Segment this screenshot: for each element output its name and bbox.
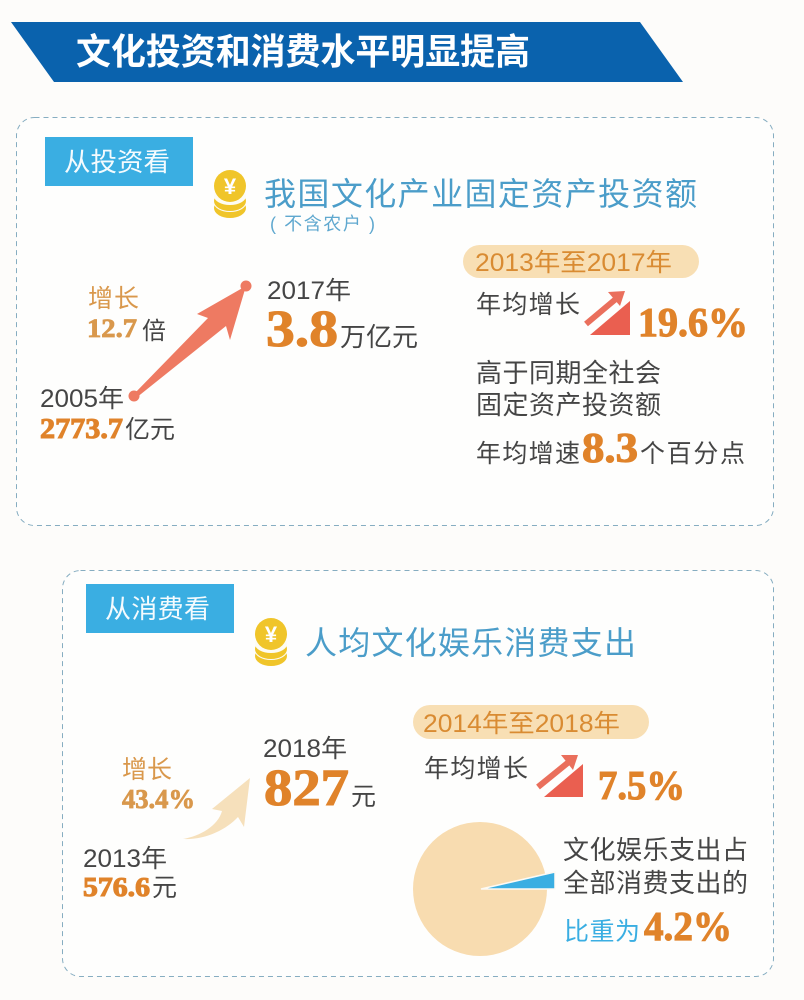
text: higher than society-wide investment: [476, 358, 661, 420]
text: average annual growth: 年均增长: [424, 755, 528, 783]
label: 2017 value: [266, 277, 418, 358]
icon: coins: [255, 618, 287, 666]
text: average annual growth: 年均增长: [476, 291, 580, 319]
label: 2018 value: [263, 735, 376, 817]
label: growth multiple: 增长: [88, 285, 139, 313]
label: 2018 value: 827: [264, 760, 349, 817]
label: 2005 value: 2773.7: [40, 413, 123, 445]
pill: 2014 to 2018: [413, 705, 649, 739]
tag: from consumption: [86, 584, 234, 633]
tag: from investment: [45, 137, 193, 186]
text: 8.3 percentage points: 8.3: [582, 426, 638, 472]
label: 2005 value: [40, 385, 175, 445]
pie chart: share of spending: [413, 822, 555, 956]
text: share of total consumption: 全部消费支出的: [563, 868, 748, 898]
label: growth multiple: 12.7: [87, 314, 137, 343]
label: 2018 value: 元: [351, 783, 376, 811]
title banner: 文化投资和消费水平明显提高: [76, 23, 530, 75]
heading: per capita spending: 人均文化娱乐消费支出: [305, 625, 636, 661]
text: 8.3 percentage points: 个百分点: [640, 440, 745, 468]
text: share of total consumption: [563, 835, 748, 949]
arrow: consumption growth: [183, 778, 250, 839]
label: 2005 value: 亿元: [125, 416, 175, 444]
label: 2013 value: 元: [152, 874, 177, 902]
text: higher than society-wide investment: 高于同期全社会: [476, 358, 661, 388]
text: higher than society-wide investment: 固定资产投资额: [476, 390, 661, 420]
pill: 2014 to 2018: 2014年至2018年: [423, 710, 620, 738]
value: 19.6 percent: 19.6%: [638, 299, 748, 345]
tag: from consumption: 从消费看: [105, 594, 210, 624]
note: excluding farmers: ( 不含农户 ): [270, 214, 375, 234]
label: 2013 value: [83, 845, 177, 902]
icon: coins: ¥: [224, 174, 237, 199]
icon: coins: ¥: [265, 622, 278, 647]
tag: from investment: 从投资看: [64, 147, 170, 177]
label: growth percent: 43.4%: [122, 784, 195, 814]
label: growth multiple: [87, 285, 166, 345]
pill: 2013 to 2017: [463, 245, 699, 278]
arrow: investment growth: [128, 280, 252, 402]
label: growth multiple: 倍: [142, 318, 166, 345]
pill: 2013 to 2017: 2013年至2017年: [475, 249, 672, 277]
icon: growth triangle arrow: [538, 755, 583, 797]
label: 2017 value: 2017年: [267, 277, 351, 305]
text: 8.3 percentage points: [476, 426, 745, 472]
panel: consumption: [62, 570, 774, 976]
label: 2013 value: 2013年: [83, 845, 167, 873]
value: 7.5 percent: 7.5%: [598, 762, 685, 808]
label: growth percent: 增长: [122, 756, 172, 784]
label: 2018 value: 2018年: [263, 735, 347, 763]
title banner: [11, 22, 683, 82]
text: share of total consumption: 4.2%: [644, 903, 732, 949]
label: 2017 value: 3.8: [266, 301, 338, 358]
text: share of total consumption: 比重为: [564, 918, 640, 946]
icon: growth triangle arrow: [586, 291, 630, 335]
text: 8.3 percentage points: 年均增速: [476, 440, 580, 468]
text: share of total consumption: 文化娱乐支出占: [563, 835, 748, 865]
panel: investment: [16, 118, 774, 526]
label: 2005 value: 2005年: [40, 385, 124, 413]
label: 2013 value: 576.6: [83, 872, 150, 902]
icon: coins: [214, 170, 246, 218]
heading: fixed asset investment: 我国文化产业固定资产投资额: [264, 176, 697, 212]
label: 2017 value: 万亿元: [340, 322, 418, 352]
label: growth percent: [122, 756, 195, 814]
